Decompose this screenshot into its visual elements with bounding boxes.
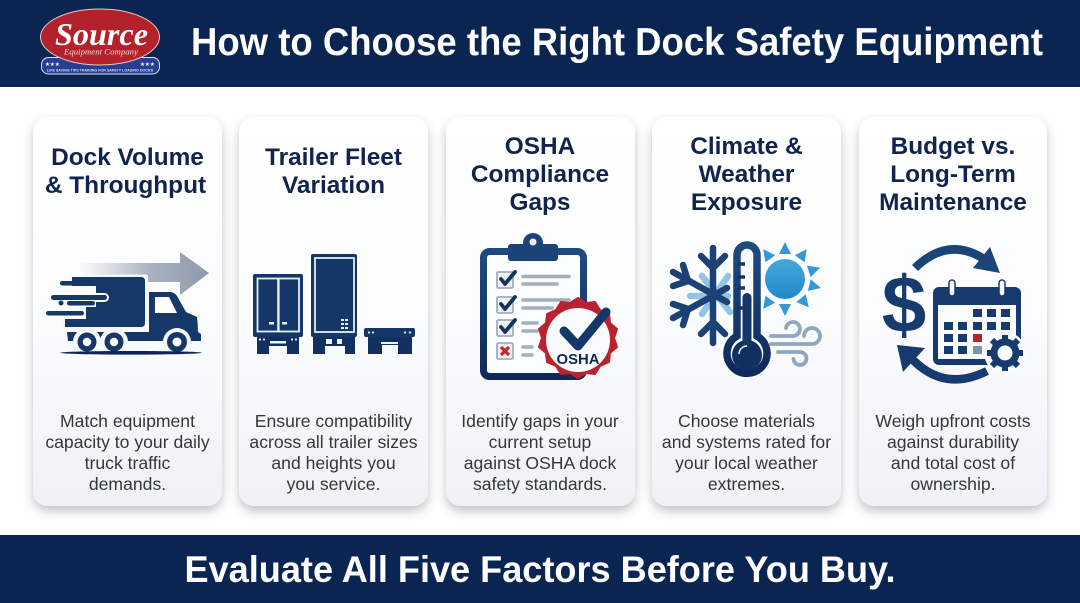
description: dock volume: Match equipment [60,411,195,431]
panel: climate and weather [652,117,841,506]
heading: climate and weather: Weather [699,161,795,188]
logo: Source Equipment Company: ★★★ [45,61,60,68]
heading: dock volume: Dock Volume [51,144,204,171]
footer callout: Evaluate All Five Factors Before You Buy. [184,549,896,590]
heading: trailer fleet: Trailer Fleet [265,144,402,171]
heading: OSHA compliance: OSHA [505,133,575,160]
description: trailer fleet: and heights you [271,453,396,473]
logo: Source Equipment Company: Source [55,16,148,52]
icon: dollar, calendar, gear and cycle arrows: $ [882,260,926,349]
header band [0,0,1080,87]
description: trailer fleet: you service. [287,474,380,494]
icon: clipboard with OSHA badge [484,233,617,378]
logo: Source Equipment Company: LIFE SAVING TIPS TRAINING FOR SAFETY LOADING DOCKS [47,68,154,72]
icon: three trailers [253,254,415,354]
heading: OSHA compliance: Compliance [471,161,609,188]
heading: budget vs maintenance: Budget vs. [891,133,1015,160]
description: budget vs maintenance: ownership. [910,474,996,494]
heading: trailer fleet: Variation [282,172,385,199]
description: trailer fleet: across all trailer sizes [249,432,418,452]
description: climate and weather: your local weather [675,453,818,473]
panel: dock volume [33,117,222,506]
description: OSHA compliance: Identify gaps in your [461,411,619,431]
panel: trailer fleet [239,117,428,506]
logo: Source Equipment Company: ★★★ [140,61,155,68]
description: OSHA compliance: safety standards. [473,474,607,494]
heading: budget vs maintenance: Maintenance [879,189,1027,216]
title: How to Choose the Right Dock Safety Equipment [191,21,1043,64]
description: budget vs maintenance: Weigh upfront costs [875,411,1031,431]
description: climate and weather: extremes. [708,474,785,494]
heading: climate and weather: Climate & [690,133,803,160]
logo: Source Equipment Company [40,9,160,74]
heading: climate and weather: Exposure [691,189,802,216]
logo: Source Equipment Company: Equipment Company [63,46,138,56]
description: trailer fleet: Ensure compatibility [255,411,412,431]
description: budget vs maintenance: and total cost of [891,453,1015,473]
description: climate and weather: Choose materials [678,411,815,431]
description: OSHA compliance: against OSHA dock [464,453,616,473]
description: dock volume: capacity to your daily [45,432,210,452]
description: OSHA compliance: current setup [489,432,592,452]
heading: budget vs maintenance: Long-Term [890,161,1016,188]
heading: OSHA compliance: Gaps [509,189,571,216]
description: budget vs maintenance: against durability [887,432,1019,452]
icon: clipboard with OSHA badge: OSHA [556,351,600,368]
icon: dollar, calendar, gear and cycle arrows [882,247,1026,379]
description: climate and weather: and systems rated for [662,432,831,452]
panel: OSHA compliance [446,117,635,506]
panel: budget vs maintenance [859,117,1047,506]
description: dock volume: demands. [89,474,166,494]
icon: fast truck with arrow [46,252,209,356]
description: dock volume: truck traffic [85,453,171,473]
footer band [0,535,1080,603]
icon: snowflake, thermometer, sun and wind [673,242,822,373]
heading: dock volume: & Throughput [45,172,206,199]
